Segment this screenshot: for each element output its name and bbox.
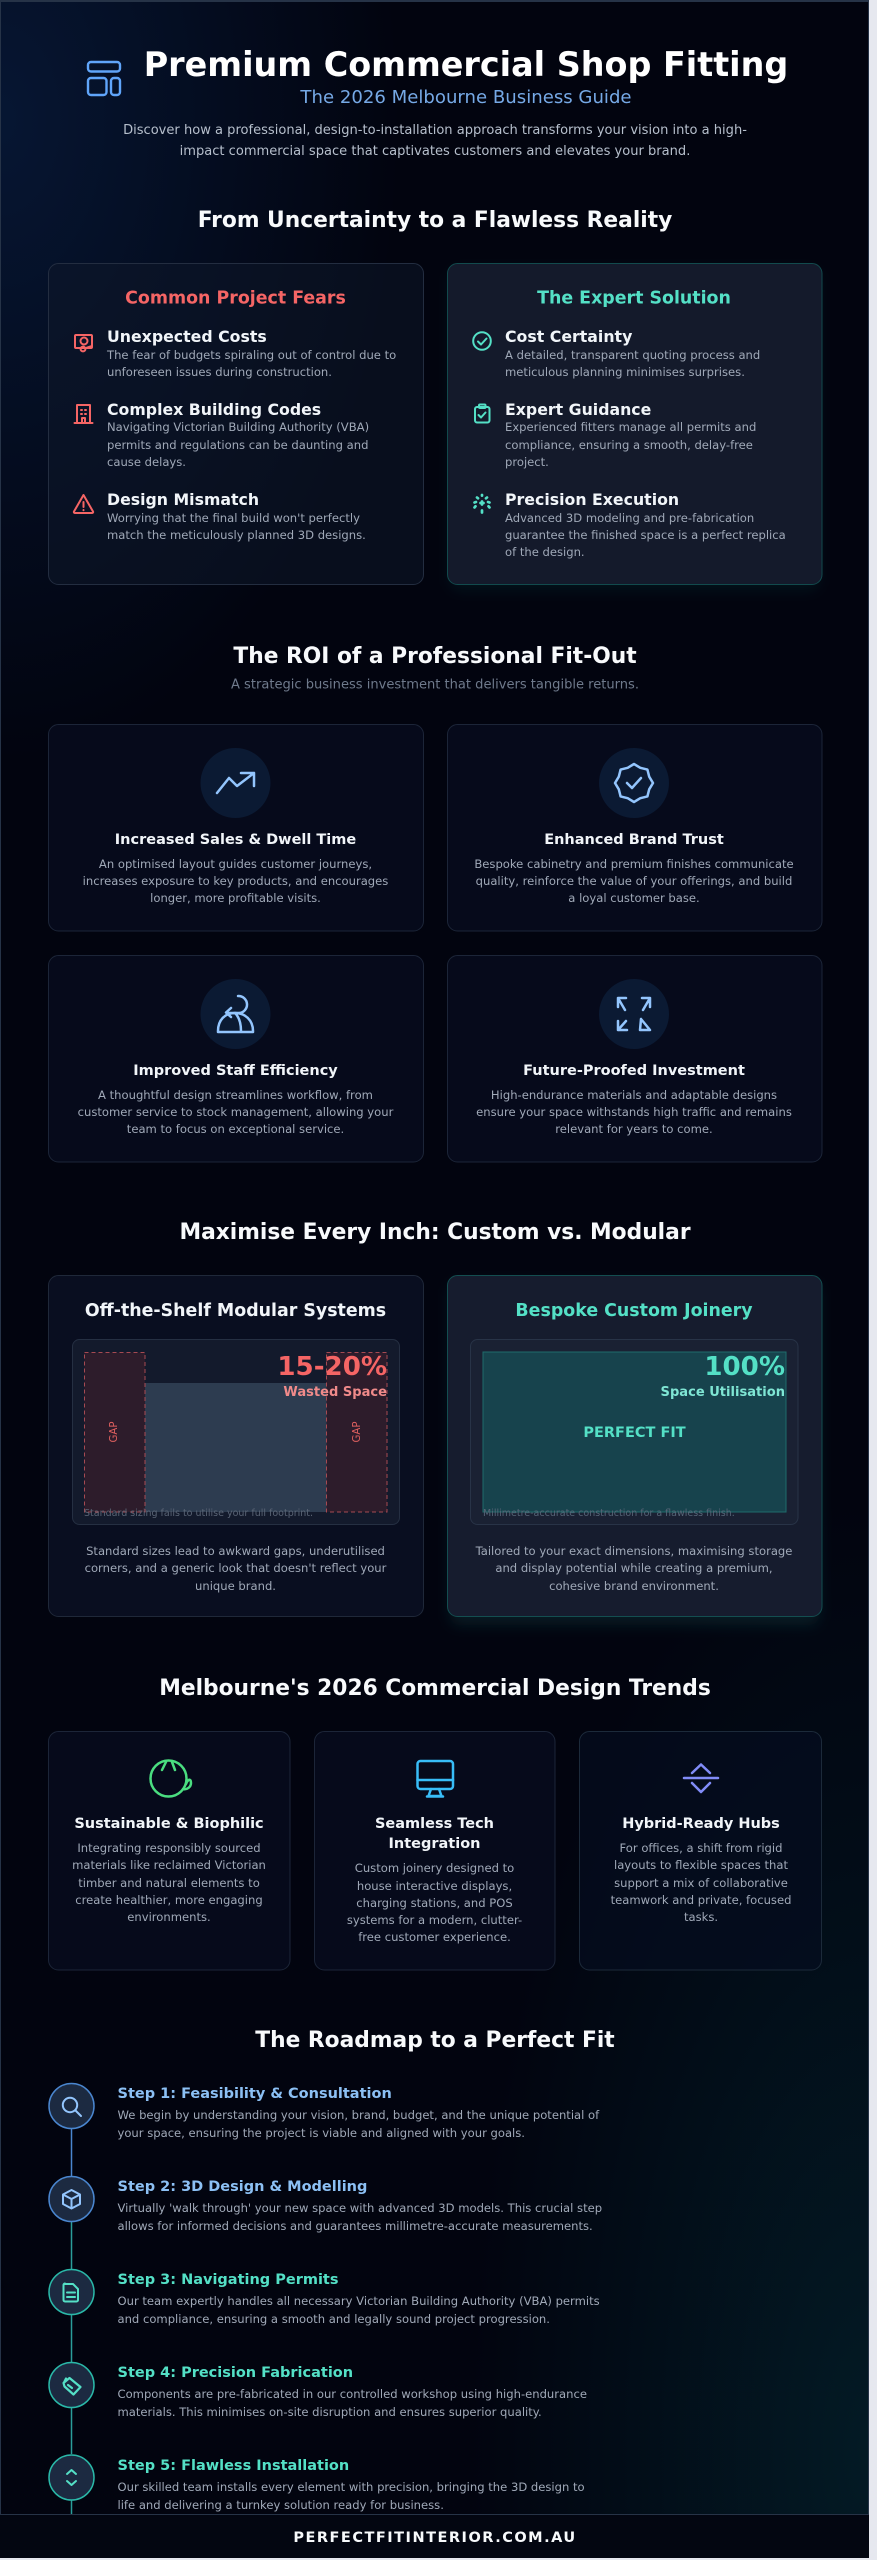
step 5	[49, 2455, 585, 2512]
caption: Millimetre-accurate construction for a flawless finish.	[483, 1508, 735, 1519]
item: unexpected costs: The fear of budgets spiraling out of control due to	[106, 348, 396, 362]
gap labels	[109, 1421, 363, 1443]
panel: bespoke joinery: Tailored to your exact dimensions, maximising storage	[475, 1544, 792, 1558]
step 4: Step 4: Precision Fabrication	[118, 2365, 353, 2381]
step 3: Our team expertly handles all necessary Victorian Building Authority (VBA) permits	[118, 2294, 600, 2308]
item: design mismatch: match the meticulously planned 3D designs.	[107, 528, 366, 542]
item: precision execution: guarantee the finished space is a perfect replica	[505, 528, 786, 542]
icon: monitor	[418, 1761, 453, 1796]
step 5: Step 5: Flawless Installation	[118, 2458, 349, 2474]
item: cost certainty: meticulous planning minimises surprises.	[505, 365, 745, 379]
item: precision execution: Precision Execution	[505, 490, 679, 509]
panel: sustainable: environments.	[127, 1910, 211, 1924]
item: design mismatch	[74, 490, 366, 542]
item: expert guidance	[475, 400, 756, 469]
step 2: allows for informed decisions and guarantees millimetre-accurate measurements.	[118, 2219, 593, 2233]
heading: design trends: Melbourne's 2026 Commercial Design Trends	[159, 1676, 711, 1701]
icon: trending up	[217, 773, 254, 793]
title: Premium Commercial Shop Fitting	[144, 45, 788, 84]
icon: staff	[218, 996, 253, 1032]
heading: ROI	[231, 644, 639, 692]
step 2: Step 2: 3D Design & Modelling	[118, 2179, 367, 2195]
panel: hybrid hubs: Hybrid-Ready Hubs	[622, 1816, 780, 1832]
icon: expand arrows	[618, 998, 650, 1030]
item: expert guidance: Expert Guidance	[505, 400, 651, 419]
step 5: Our skilled team installs every element with precision, bringing the 3D design to	[118, 2480, 585, 2494]
step 2: Virtually 'walk through' your new space with advanced 3D models. This crucial step	[118, 2201, 602, 2215]
panel: hybrid hubs	[580, 1732, 822, 1970]
panel: modular systems: unique brand.	[195, 1579, 276, 1593]
step 1	[49, 2084, 600, 2140]
panel: increased sales: longer, more profitable visits.	[150, 891, 321, 905]
panel: sustainable	[48, 1732, 290, 1970]
diagram: wasted space	[72, 1340, 400, 1524]
panel: bespoke joinery: and display potential while creating a premium,	[495, 1561, 773, 1575]
panel: common project fears	[48, 264, 424, 584]
footer	[0, 2514, 869, 2558]
icon: sprout	[150, 1760, 191, 1796]
panel: increased sales: increases exposure to key products, and encourages	[83, 874, 388, 888]
item: unexpected costs: unforeseen issues during construction.	[107, 365, 332, 379]
item: precision execution: Advanced 3D modeling and pre-fabrication	[505, 511, 754, 525]
panel: seamless tech: systems for a modern, clutter-	[347, 1913, 522, 1927]
panel: staff efficiency: A thoughtful design streamlines workflow, from	[98, 1088, 373, 1102]
step 4: materials. This minimises on-site disruption and ensures superior quality.	[118, 2405, 542, 2419]
panel: sustainable: Integrating responsibly sourced	[77, 1841, 261, 1855]
panel: seamless tech: Custom joinery designed to	[355, 1861, 514, 1875]
connector lines	[70, 2129, 72, 2514]
item: complex building codes: Navigating Victorian Building Authority (VBA)	[107, 420, 369, 434]
panel: modular systems	[48, 1276, 424, 1616]
panel heading: Common Project Fears	[125, 288, 346, 308]
timeline	[49, 2084, 602, 2514]
item: expert guidance: Experienced fitters manage all permits and	[505, 420, 756, 434]
panel: the expert solution	[448, 264, 822, 590]
step 3: and compliance, ensuring a smooth and legally sound project progression.	[118, 2312, 550, 2326]
step 3: Step 3: Navigating Permits	[118, 2272, 338, 2288]
stat: wasted space: Wasted Space	[283, 1385, 387, 1400]
panel: hybrid hubs: teamwork and private, focused	[611, 1893, 791, 1907]
panel: future-proofed	[448, 956, 822, 1162]
panel: sustainable: timber and natural elements to	[78, 1876, 260, 1890]
panel: hybrid hubs: For offices, a shift from rigid	[620, 1841, 782, 1855]
gap labels: GAP	[109, 1421, 120, 1443]
step 2	[49, 2176, 602, 2233]
heading: roadmap: The Roadmap to a Perfect Fit	[255, 2028, 615, 2053]
item: unexpected costs	[75, 327, 396, 379]
panel heading: The Expert Solution	[537, 288, 731, 308]
ROI subheading: A strategic business investment that delivers tangible returns.	[231, 678, 639, 692]
panel: staff efficiency: Improved Staff Efficiency	[133, 1063, 338, 1079]
step 4	[49, 2362, 587, 2419]
item: complex building codes: Complex Building Codes	[107, 400, 321, 419]
subtitle: The 2026 Melbourne Business Guide	[299, 87, 632, 108]
intro text: impact commercial space that captivates customers and elevates your brand.	[180, 144, 690, 159]
item: cost certainty: Cost Certainty	[505, 327, 632, 346]
item: cost certainty	[473, 327, 760, 379]
item: design mismatch: Design Mismatch	[107, 490, 259, 509]
panel heading: Off-the-Shelf Modular Systems	[85, 1301, 386, 1321]
header	[88, 45, 788, 159]
panel: increased sales: An optimised layout guides customer journeys,	[99, 857, 372, 871]
panel: sustainable: materials like reclaimed Victorian	[72, 1858, 266, 1872]
panel: increased sales	[48, 724, 424, 931]
item: complex building codes: cause delays.	[107, 455, 186, 469]
item: complex building codes	[74, 400, 369, 469]
panel: brand trust: Enhanced Brand Trust	[544, 832, 724, 848]
heading: custom vs modular: Maximise Every Inch: Custom vs. Modular	[179, 1220, 691, 1245]
item: unexpected costs: Unexpected Costs	[107, 327, 267, 346]
panel: hybrid hubs: support a mix of collaborative	[614, 1876, 788, 1890]
panel: staff efficiency	[48, 956, 424, 1162]
panel: modular systems: corners, and a generic look that doesn't reflect your	[85, 1561, 387, 1575]
step 1: Step 1: Feasibility & Consultation	[118, 2086, 392, 2102]
step 4: Components are pre-fabricated in our controlled workshop using high-endurance	[118, 2387, 587, 2401]
item: precision execution: of the design.	[505, 545, 585, 559]
panel: hybrid hubs: tasks.	[684, 1910, 718, 1924]
panel: brand trust: a loyal customer base.	[568, 891, 700, 905]
item: precision execution	[474, 490, 786, 559]
panel: sustainable: create healthier, more engaging	[75, 1893, 263, 1907]
stat: wasted space	[277, 1352, 387, 1400]
icon: badge check	[615, 764, 653, 802]
panel: future-proofed: ensure your space withstands high traffic and remains	[476, 1105, 792, 1119]
panel: increased sales: Increased Sales & Dwell Time	[115, 832, 356, 848]
step 1: We begin by understanding your vision, brand, budget, and the unique potential of	[118, 2108, 600, 2122]
item: expert guidance: compliance, ensuring a smooth, delay-free	[505, 438, 753, 452]
gap labels: GAP	[352, 1421, 363, 1443]
stat: space utilisation: 100%	[704, 1352, 785, 1382]
item: complex building codes: permits and regulations can be daunting and	[107, 438, 368, 452]
stat: space utilisation	[661, 1352, 785, 1400]
panel: sustainable: Sustainable & Biophilic	[74, 1816, 264, 1832]
panel: future-proofed: Future-Proofed Investment	[523, 1063, 745, 1079]
panel: seamless tech	[314, 1732, 555, 1970]
panel heading: Bespoke Custom Joinery	[515, 1301, 753, 1321]
panel: staff efficiency: team to focus on exceptional service.	[127, 1122, 344, 1136]
panel: seamless tech: house interactive displays,	[357, 1879, 512, 1893]
panel: seamless tech: free customer experience.	[358, 1930, 511, 1944]
panel: staff efficiency: customer service to stock management, allowing your	[78, 1105, 394, 1119]
intro text: Discover how a professional, design-to-installation approach transforms your vision into a high-	[123, 123, 747, 138]
panel: brand trust: Bespoke cabinetry and premium finishes communicate	[474, 857, 794, 871]
heading: ROI: The ROI of a Professional Fit-Out	[233, 644, 637, 669]
panel: seamless tech: Integration	[389, 1836, 480, 1852]
icon: layout template	[88, 62, 120, 95]
item: cost certainty: A detailed, transparent quoting process and	[505, 348, 760, 362]
step 1: your space, ensuring the project is viable and aligned with your goals.	[118, 2126, 525, 2140]
panel: future-proofed: High-endurance materials and adaptable designs	[491, 1088, 777, 1102]
step 5: life and delivering a turnkey solution ready for business.	[118, 2498, 444, 2512]
stat: wasted space: 15-20%	[277, 1352, 387, 1382]
panel: bespoke joinery	[448, 1276, 822, 1625]
diagram: perfect fit	[470, 1340, 798, 1524]
panel: future-proofed: relevant for years to come.	[555, 1122, 713, 1136]
caption: Standard sizing fails to utilise your full footprint.	[84, 1508, 313, 1519]
panel: seamless tech: charging stations, and POS	[356, 1896, 513, 1910]
step 3	[49, 2270, 600, 2326]
heading: uncertainty to reality: From Uncertainty to a Flawless Reality	[198, 208, 672, 233]
footer url: PERFECTFITINTERIOR.COM.AU	[293, 2530, 577, 2546]
panel: brand trust: quality, reinforce the value of your offerings, and build	[476, 874, 792, 888]
panel: seamless tech: Seamless Tech	[375, 1816, 494, 1832]
panel: hybrid hubs: layouts to flexible spaces that	[614, 1858, 788, 1872]
panel: modular systems: Standard sizes lead to awkward gaps, underutilised	[86, 1544, 385, 1558]
item: expert guidance: project.	[505, 455, 549, 469]
item: design mismatch: Worrying that the final build won't perfectly	[107, 511, 360, 525]
intro text	[123, 123, 747, 159]
panel: bespoke joinery: cohesive brand environment.	[549, 1579, 719, 1593]
stat: space utilisation: Space Utilisation	[661, 1385, 785, 1400]
perfect fit label: PERFECT FIT	[583, 1425, 686, 1441]
icon: hybrid split	[684, 1764, 718, 1792]
panel: brand trust	[448, 724, 822, 931]
